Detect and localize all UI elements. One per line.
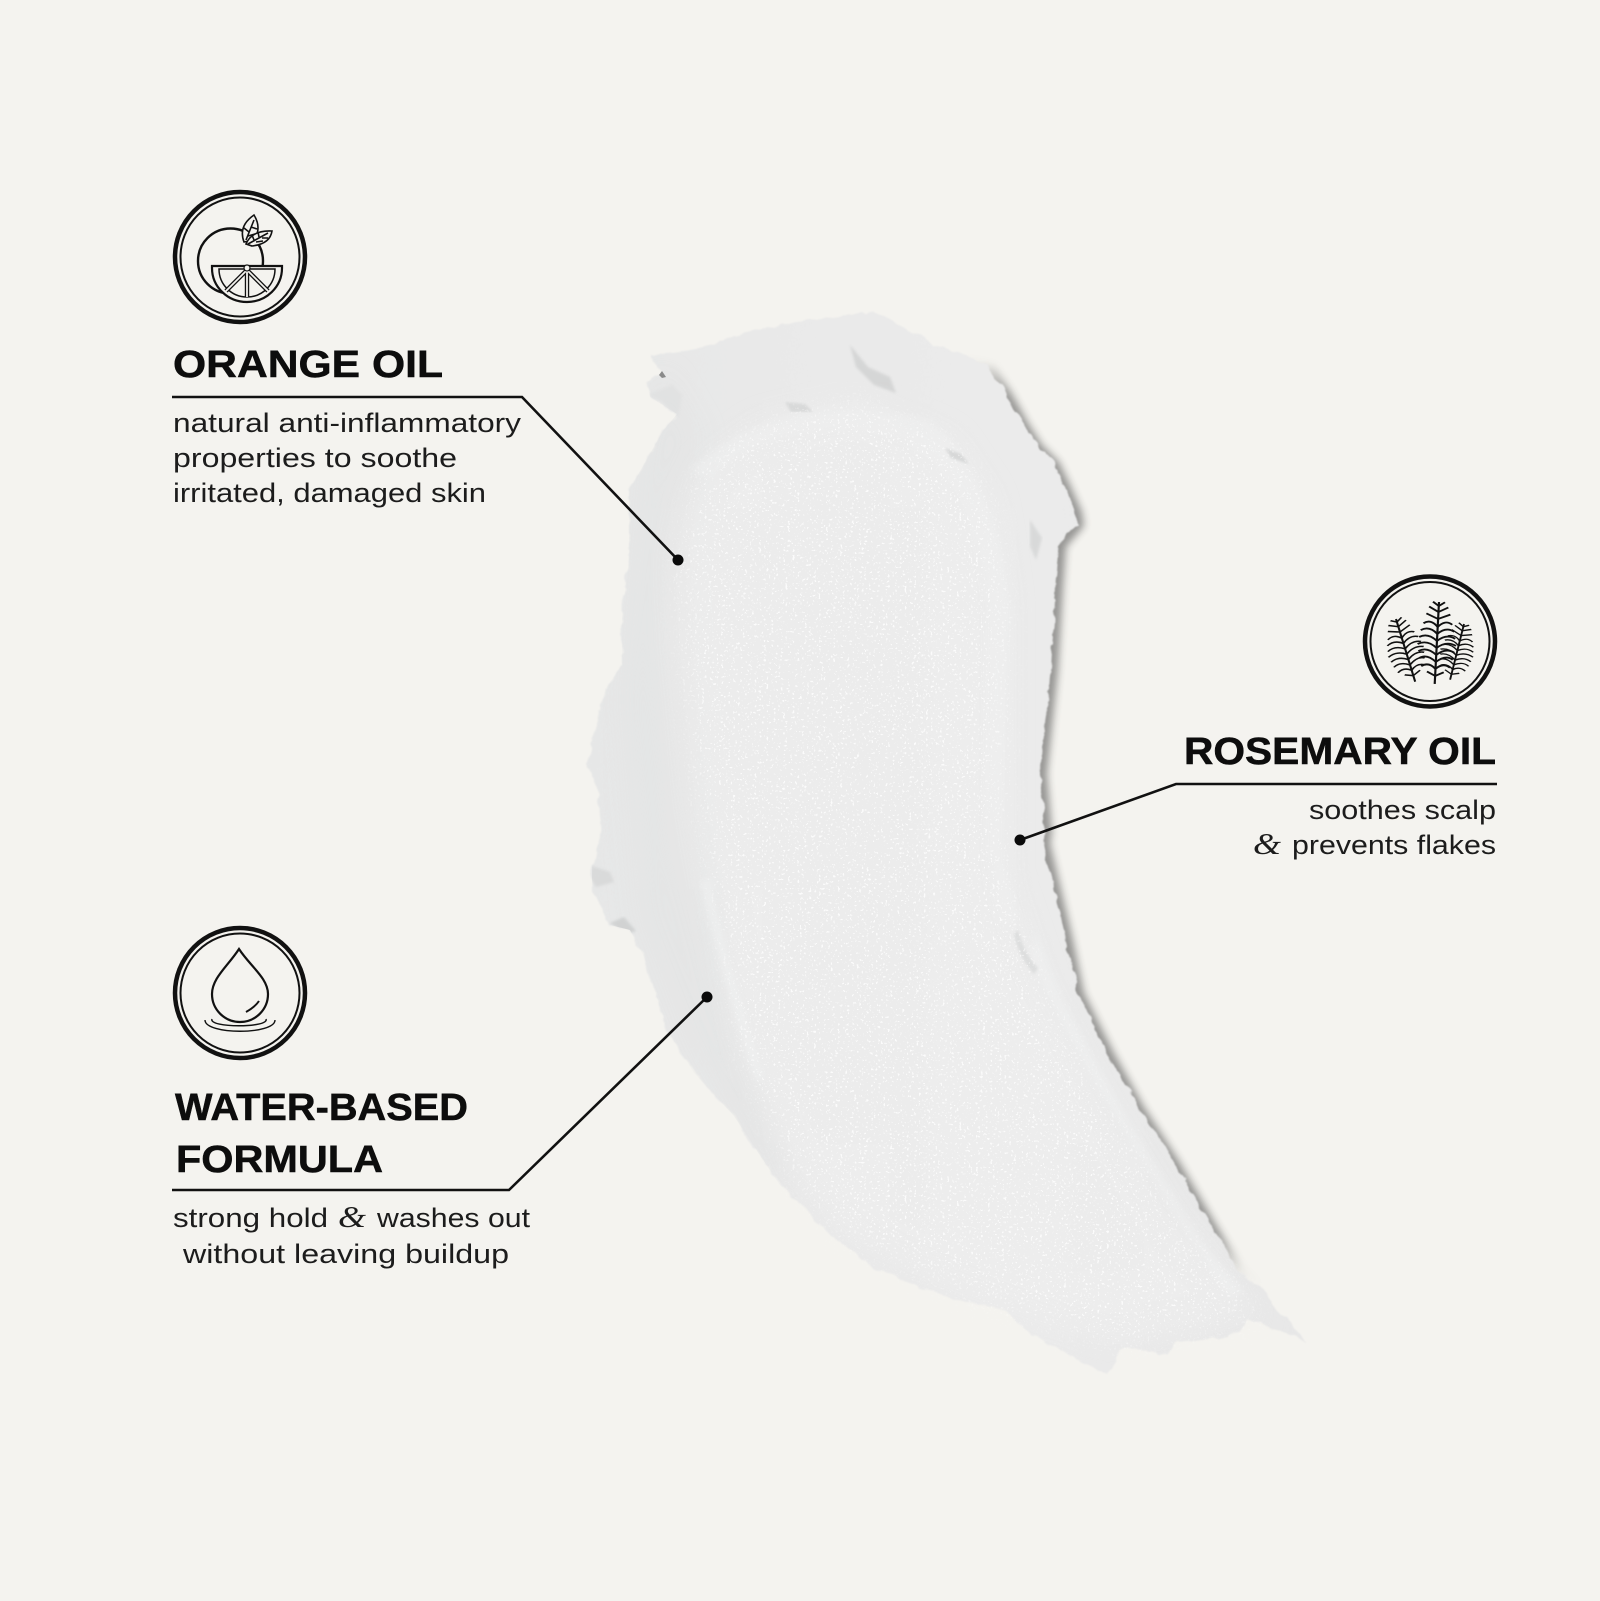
callout: orange oil (172, 192, 684, 566)
infographic canvas (172, 190, 1498, 1372)
leader line (172, 397, 684, 566)
description: prevents flakes (1292, 830, 1496, 860)
heading (175, 1087, 468, 1181)
heading: ROSEMARY OIL (1184, 731, 1496, 773)
description (173, 408, 522, 508)
description: & (1253, 826, 1281, 861)
leader line (172, 992, 712, 1190)
description: natural anti-inflammatory (173, 408, 522, 438)
heading: ORANGE OIL (173, 344, 443, 386)
icon: orange with leaves in double ring (175, 192, 305, 322)
icon: water drop with ripples in double ring (175, 928, 305, 1058)
description: soothes scalp (1309, 795, 1496, 825)
heading: WATER-BASED (175, 1087, 468, 1129)
description: without leaving buildup (182, 1239, 509, 1269)
description (173, 1199, 531, 1269)
icon: rosemary sprigs in double ring (1365, 576, 1495, 706)
callout: water-based formula (172, 928, 712, 1269)
description: irritated, damaged skin (173, 478, 486, 508)
description: & (338, 1199, 366, 1234)
description: strong hold (173, 1203, 328, 1233)
callout: rosemary oil (1014, 576, 1497, 861)
product swatch: white cream smear (586, 312, 1303, 1372)
heading: FORMULA (176, 1139, 383, 1181)
description (1253, 795, 1496, 861)
leader line (1014, 784, 1497, 846)
description: properties to soothe (173, 443, 457, 473)
description: washes out (376, 1203, 531, 1233)
